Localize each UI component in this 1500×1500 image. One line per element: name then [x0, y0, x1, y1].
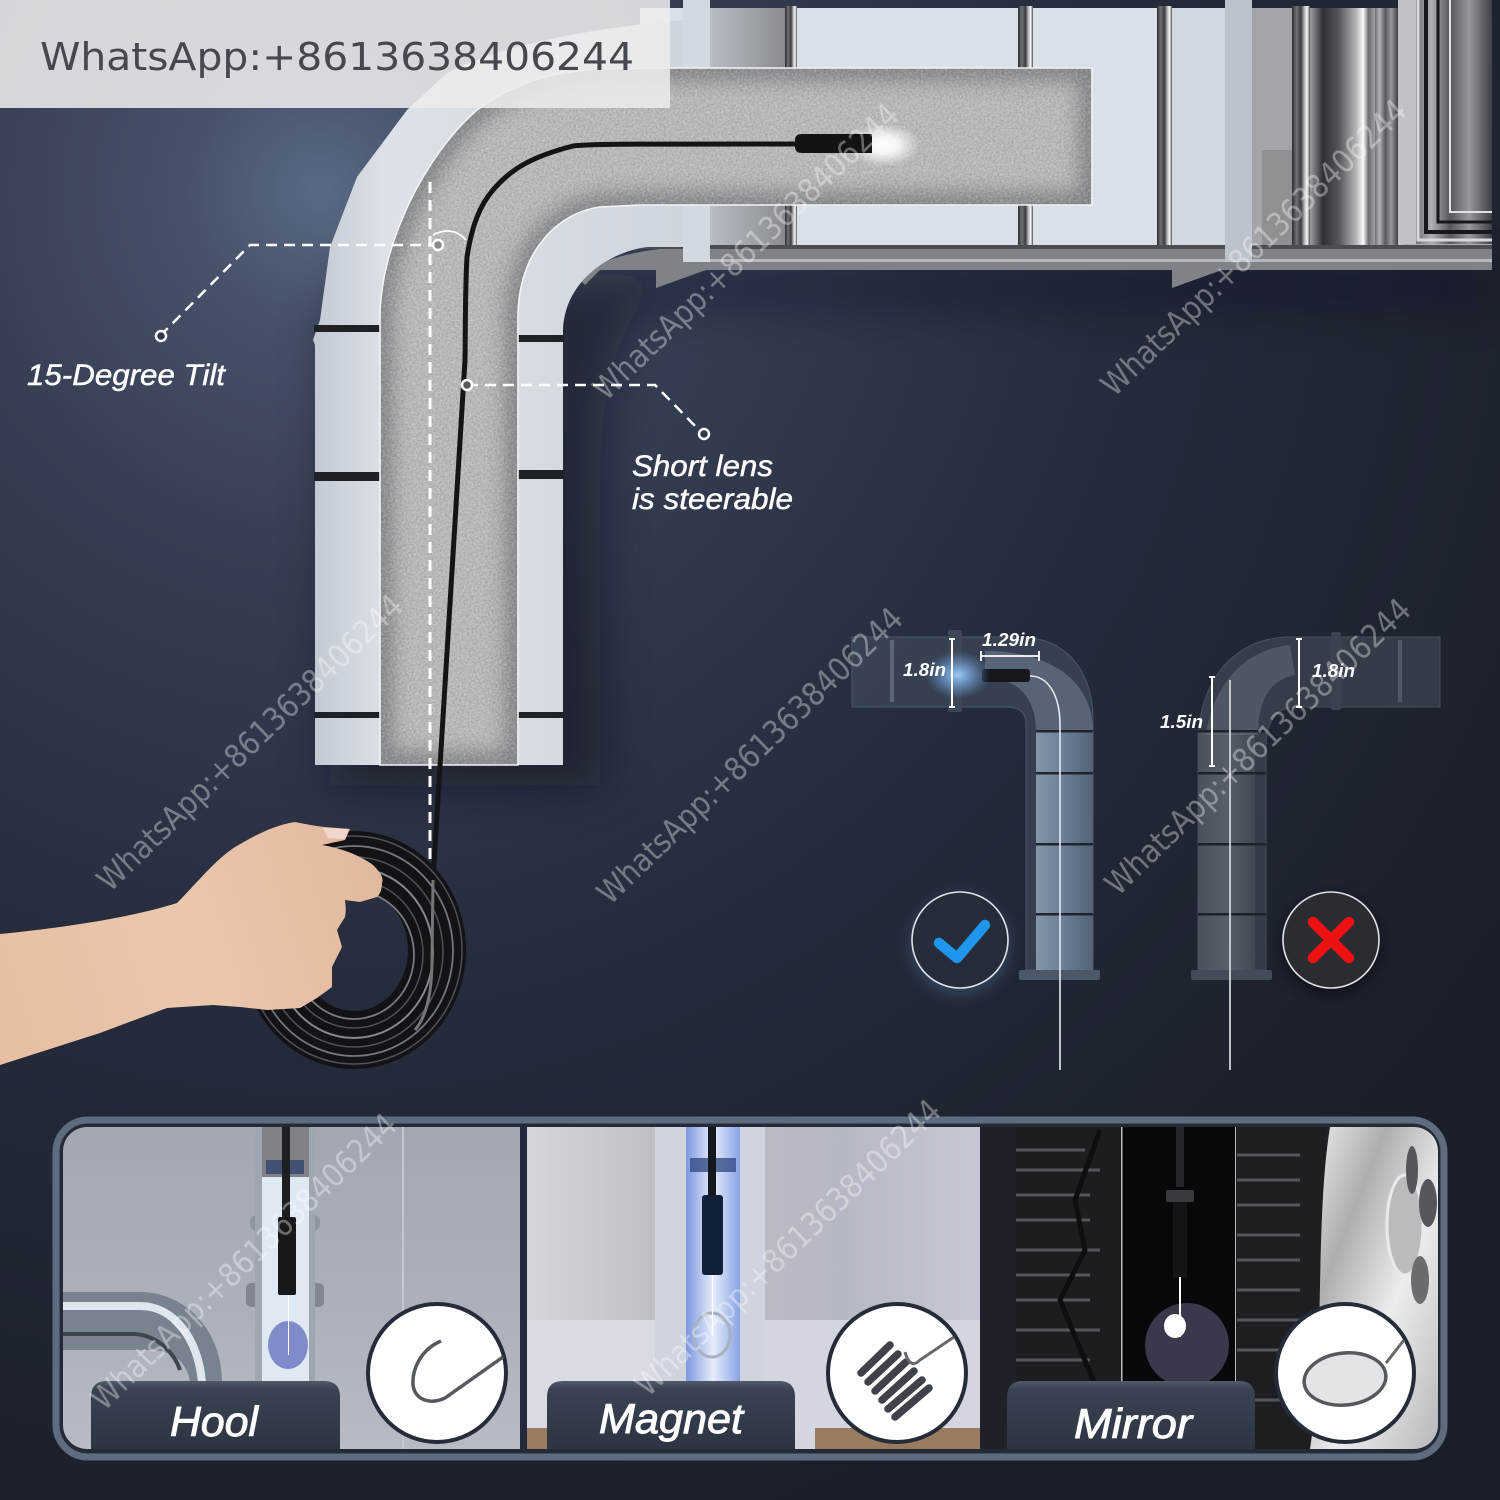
label: Hool	[91, 1381, 340, 1449]
duct shadow	[330, 275, 1492, 785]
pipe measurements: 1.5in	[1160, 712, 1203, 732]
top-left contact banner: WhatsApp:+8613638406244	[40, 35, 634, 79]
icon: hook tool	[368, 1304, 506, 1442]
hook photo	[63, 1127, 520, 1449]
callout: short lens is steerable: is steerable	[632, 483, 793, 516]
scope lens head	[795, 134, 872, 153]
icon: blue check	[910, 892, 1010, 995]
watermarks: WhatsApp:+8613638406244	[585, 96, 906, 408]
magnet photo	[520, 1127, 980, 1450]
callout: 15-degree tilt	[27, 182, 466, 877]
label: Mirror	[1007, 1381, 1255, 1449]
label: Hool: Hool	[170, 1398, 260, 1445]
galvanized inner duct	[380, 68, 1092, 765]
lens light	[848, 123, 920, 167]
icon: mirror tool	[1276, 1304, 1414, 1442]
pipe measurements: 1.8in	[903, 660, 946, 680]
bad-fit pipe diagram	[1191, 632, 1440, 1070]
rear horizontal ducts	[577, 0, 1492, 288]
callout: 15-degree tilt: 15-Degree Tilt	[27, 359, 227, 392]
good-fit pipe diagram	[852, 630, 1100, 1070]
watermarks: WhatsApp:+8613638406244	[83, 1106, 404, 1418]
callout: short lens is steerable	[462, 380, 793, 516]
watermarks: WhatsApp:+8613638406244	[1097, 591, 1418, 903]
transparent elbow pipe	[1198, 637, 1440, 970]
duct system	[313, 0, 1492, 880]
vertical duct ribs	[314, 325, 564, 718]
cable coil and hand	[0, 822, 462, 1065]
watermarks: WhatsApp:+8613638406244	[89, 587, 410, 899]
cable drop into coil	[415, 880, 433, 1030]
pipe measurements: 1.8in	[1312, 661, 1355, 681]
light outer elbow band	[313, 20, 683, 765]
panel frame	[56, 1120, 1444, 1457]
panel: accessories	[56, 1120, 1444, 1457]
scope cable in duct	[433, 123, 920, 880]
icon: magnet coil tool	[828, 1304, 966, 1442]
label: Magnet	[547, 1381, 795, 1449]
pipe measurements: 1.29in	[982, 630, 1036, 650]
duct bottom rail	[577, 247, 1492, 288]
watermarks: WhatsApp:+8613638406244	[1093, 92, 1414, 404]
camera inside pipe	[982, 676, 1060, 1070]
pipe measurements	[903, 630, 1355, 766]
hand	[0, 822, 383, 1065]
duct straps	[683, 0, 710, 262]
top-left contact banner	[0, 0, 670, 108]
mirror photo	[980, 1127, 1438, 1449]
watermarks	[83, 92, 1418, 1418]
watermarks: WhatsApp:+8613638406244	[627, 1092, 948, 1404]
cable coil	[246, 836, 462, 1064]
callout: short lens is steerable: Short lens	[632, 450, 773, 483]
label: Mirror: Mirror	[1074, 1400, 1194, 1447]
fingernail	[323, 828, 349, 839]
label: Magnet: Magnet	[599, 1395, 745, 1442]
watermarks: WhatsApp:+8613638406244	[589, 600, 910, 912]
icon: red cross	[1281, 892, 1381, 995]
transparent elbow pipe	[852, 637, 1093, 970]
